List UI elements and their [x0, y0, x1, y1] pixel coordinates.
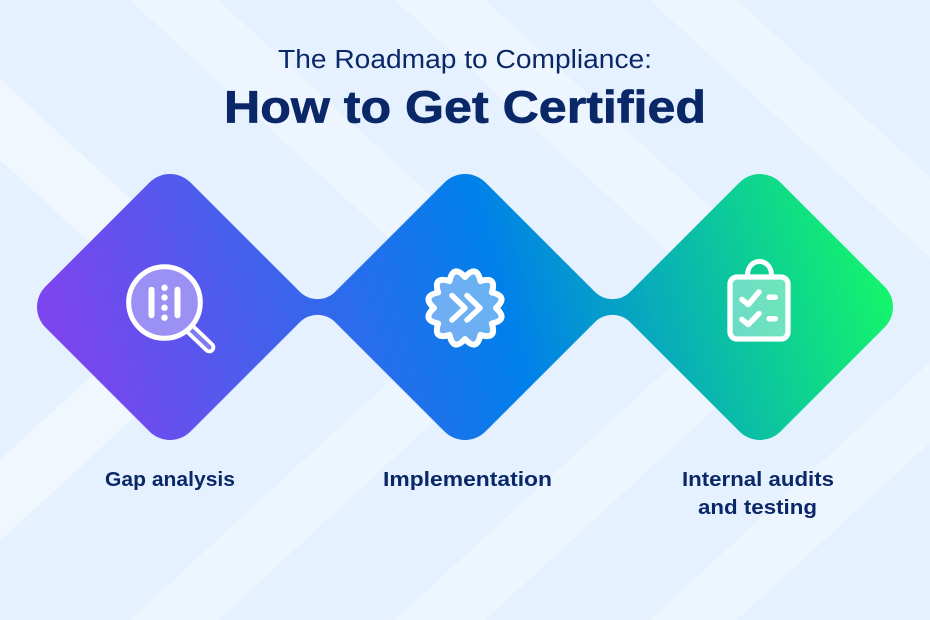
connected diamond band	[37, 174, 893, 440]
label: internal audits and testing: and testing	[698, 497, 817, 519]
main heading: How to Get Certified	[224, 82, 706, 132]
label: implementation: Implementation	[383, 469, 552, 491]
label: gap analysis: Gap analysis	[105, 469, 235, 491]
icon: scalloped badge with double chevrons	[428, 271, 502, 345]
label: internal audits and testing	[682, 469, 834, 519]
icon: magnifying glass	[129, 267, 209, 347]
label: internal audits and testing: Internal audits	[682, 469, 834, 491]
icon: clipboard checklist	[730, 262, 788, 339]
title	[224, 46, 706, 132]
subtitle: The Roadmap to Compliance:	[278, 46, 652, 74]
